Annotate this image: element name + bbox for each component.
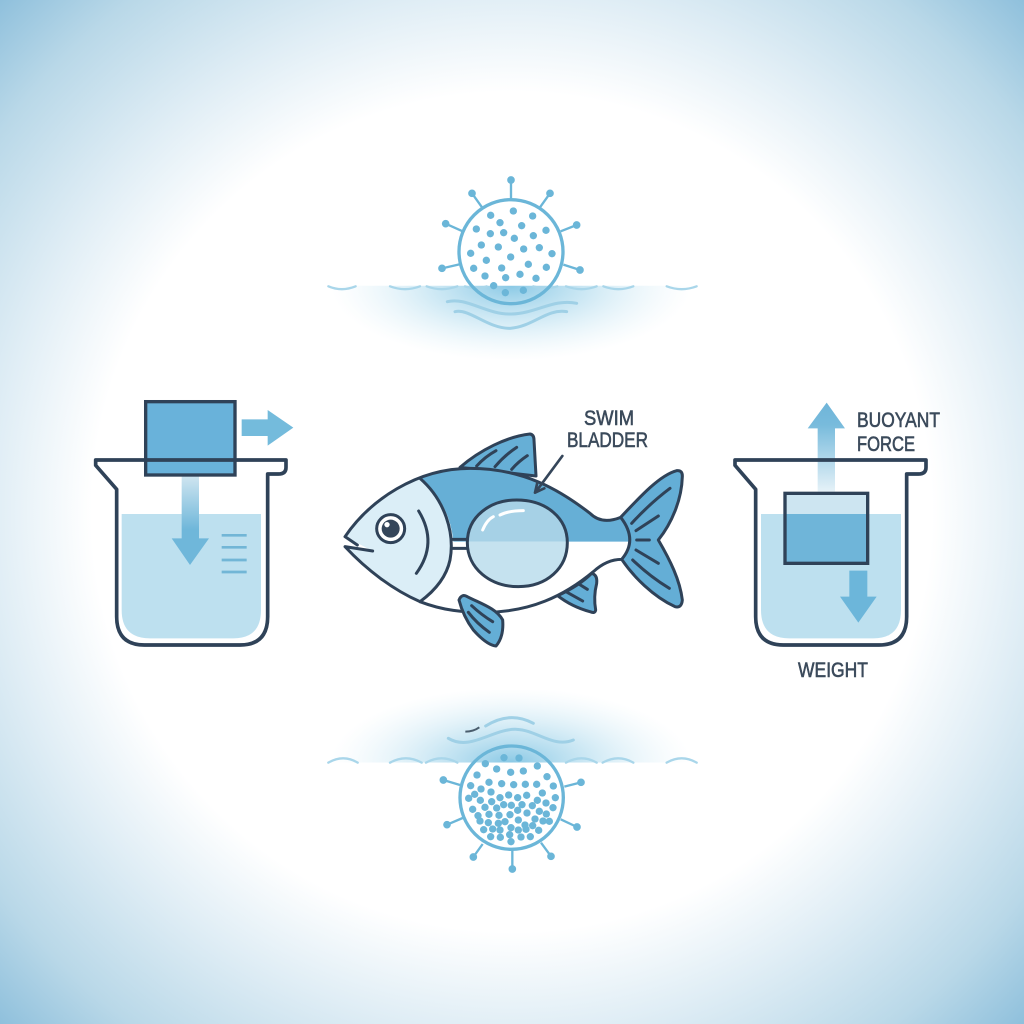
body outline: [345, 468, 630, 612]
weight arrow: [840, 571, 877, 623]
gill arc: [416, 511, 428, 573]
block: [146, 402, 235, 475]
swim bladder duct: [452, 539, 468, 548]
label: buoyant force: FORCE: [857, 433, 915, 456]
label: swim bladder: SWIM: [584, 407, 634, 430]
buoyant force arrow: [808, 403, 845, 492]
right beaker: buoyant force and weight: [735, 403, 926, 645]
particle circle: [460, 746, 563, 849]
label: swim bladder: [567, 407, 648, 452]
head line: [420, 478, 451, 602]
label: buoyant force: BUOYANT: [857, 409, 940, 432]
surface wavelets: [328, 286, 697, 289]
ripples: [447, 301, 577, 328]
sideways arrow: [242, 410, 293, 446]
water glow: [358, 286, 664, 350]
body blue upper: [420, 468, 629, 542]
particle dots: [465, 754, 559, 845]
beaker outline: [96, 460, 286, 645]
body white: [345, 468, 630, 612]
eye: [377, 515, 405, 543]
particle dots: [467, 207, 556, 296]
pectoral fin: [459, 596, 503, 646]
ripples: [448, 718, 573, 742]
water: [122, 514, 261, 638]
fish with swim bladder: [345, 434, 682, 646]
label: weight: WEIGHT: [798, 659, 868, 682]
surface wavelets: [328, 758, 697, 763]
spikes: [439, 177, 583, 273]
floating particle at water surface: [320, 177, 710, 359]
spikes: [441, 777, 584, 872]
head: [345, 478, 451, 602]
swim bladder: [467, 500, 567, 587]
beaker outline: [735, 460, 926, 645]
label: buoyant force: [857, 409, 940, 456]
anal fin: [558, 573, 597, 613]
sinking arrow: [172, 476, 209, 565]
dorsal fin: [460, 434, 536, 476]
sinking particle below water surface: [320, 690, 710, 872]
label arrow: [535, 456, 562, 493]
water glow: [358, 699, 664, 763]
particle circle: [459, 200, 563, 304]
label: swim bladder: BLADDER: [567, 429, 648, 452]
tail fin: [621, 471, 682, 607]
water: [761, 514, 901, 638]
left beaker: block entering water: [96, 402, 293, 645]
block: [785, 493, 868, 563]
stray mark: [465, 727, 479, 732]
scale ticks: [222, 535, 247, 572]
